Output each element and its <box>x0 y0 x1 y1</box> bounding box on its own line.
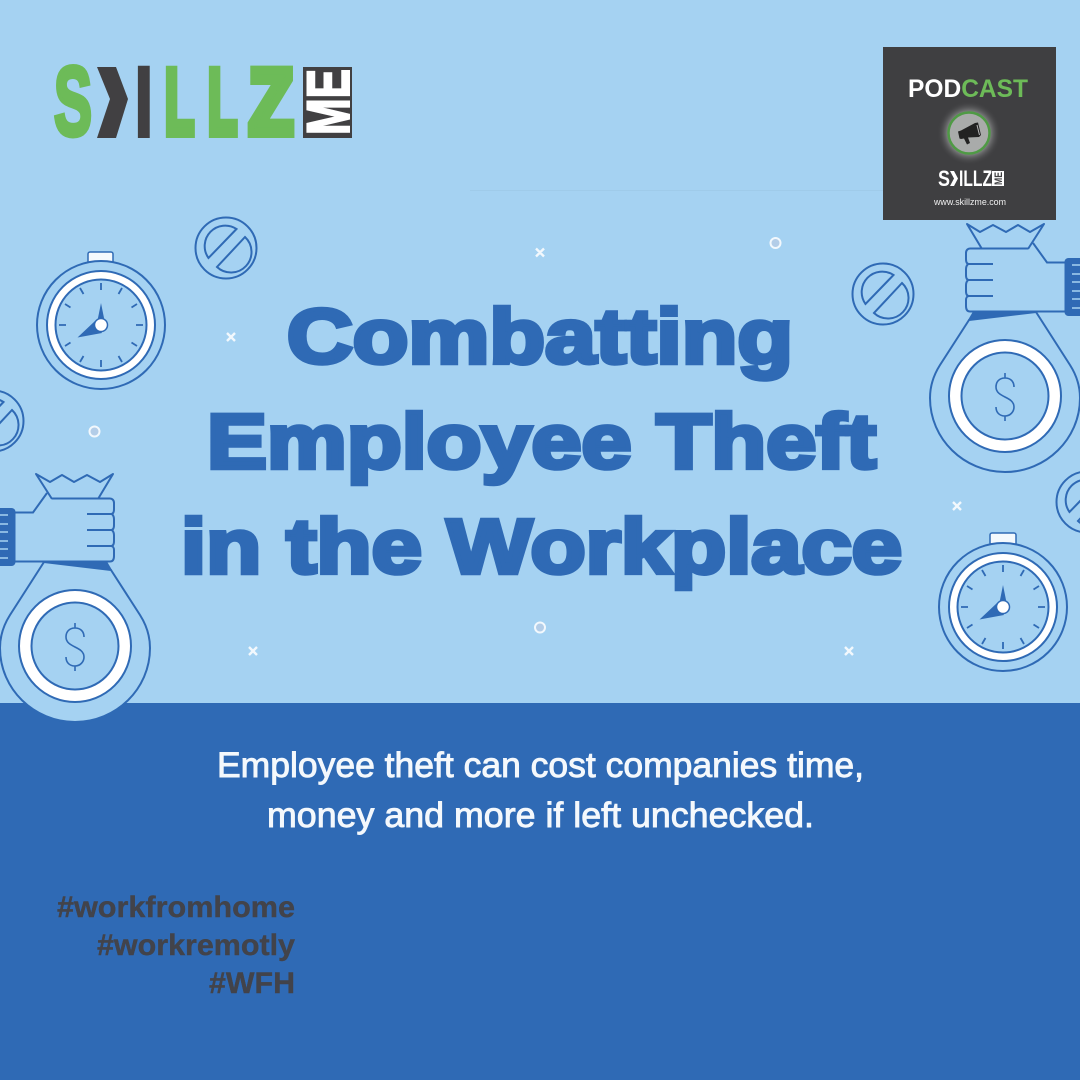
hashtags: #WFH <box>209 967 295 1000</box>
logo: SKILLZ ME: ME <box>295 69 362 135</box>
icon: money bag right <box>930 224 1080 472</box>
title: Combatting <box>287 294 793 380</box>
podcast label: PODCAST <box>908 75 1028 103</box>
small logo: ILLZ <box>959 166 992 191</box>
bottom band <box>0 703 1080 1080</box>
logo: SKILLZ ME: L <box>208 52 237 154</box>
icon: megaphone <box>948 112 990 154</box>
website url: www.skillzme.com <box>933 197 1006 208</box>
subtitle: money and more if left unchecked. <box>267 796 814 835</box>
icon: stopwatch right <box>939 533 1067 671</box>
title <box>181 294 902 590</box>
title: in the Workplace <box>181 504 902 590</box>
podcast badge <box>883 47 1056 220</box>
hashtags <box>57 891 295 1000</box>
icon: stopwatch left <box>37 252 165 389</box>
subtitle: Employee theft can cost companies time, <box>217 746 864 785</box>
icon: no sign right edge <box>1056 472 1080 532</box>
icon: money bag left <box>0 474 150 722</box>
decorative crosses and circles <box>90 238 961 655</box>
logo: SKILLZ ME: I <box>137 52 151 154</box>
small logo: S <box>938 166 950 191</box>
hashtags: #workfromhome <box>57 891 295 924</box>
small logo <box>938 166 1005 191</box>
icon: no sign top right <box>852 264 914 324</box>
logo: SKILLZ ME: L <box>165 52 194 154</box>
title: Employee Theft <box>207 399 876 485</box>
logo: SKILLZ ME: S <box>54 46 92 156</box>
logo: SKILLZ ME: Z <box>249 52 293 154</box>
logo: SKILLZ ME <box>54 46 362 156</box>
icon: no sign top left <box>196 218 256 278</box>
hashtags: #workremotly <box>97 929 295 962</box>
icon: no sign left edge <box>0 390 24 452</box>
subtitle <box>217 746 864 835</box>
small logo: ME <box>993 172 1005 185</box>
